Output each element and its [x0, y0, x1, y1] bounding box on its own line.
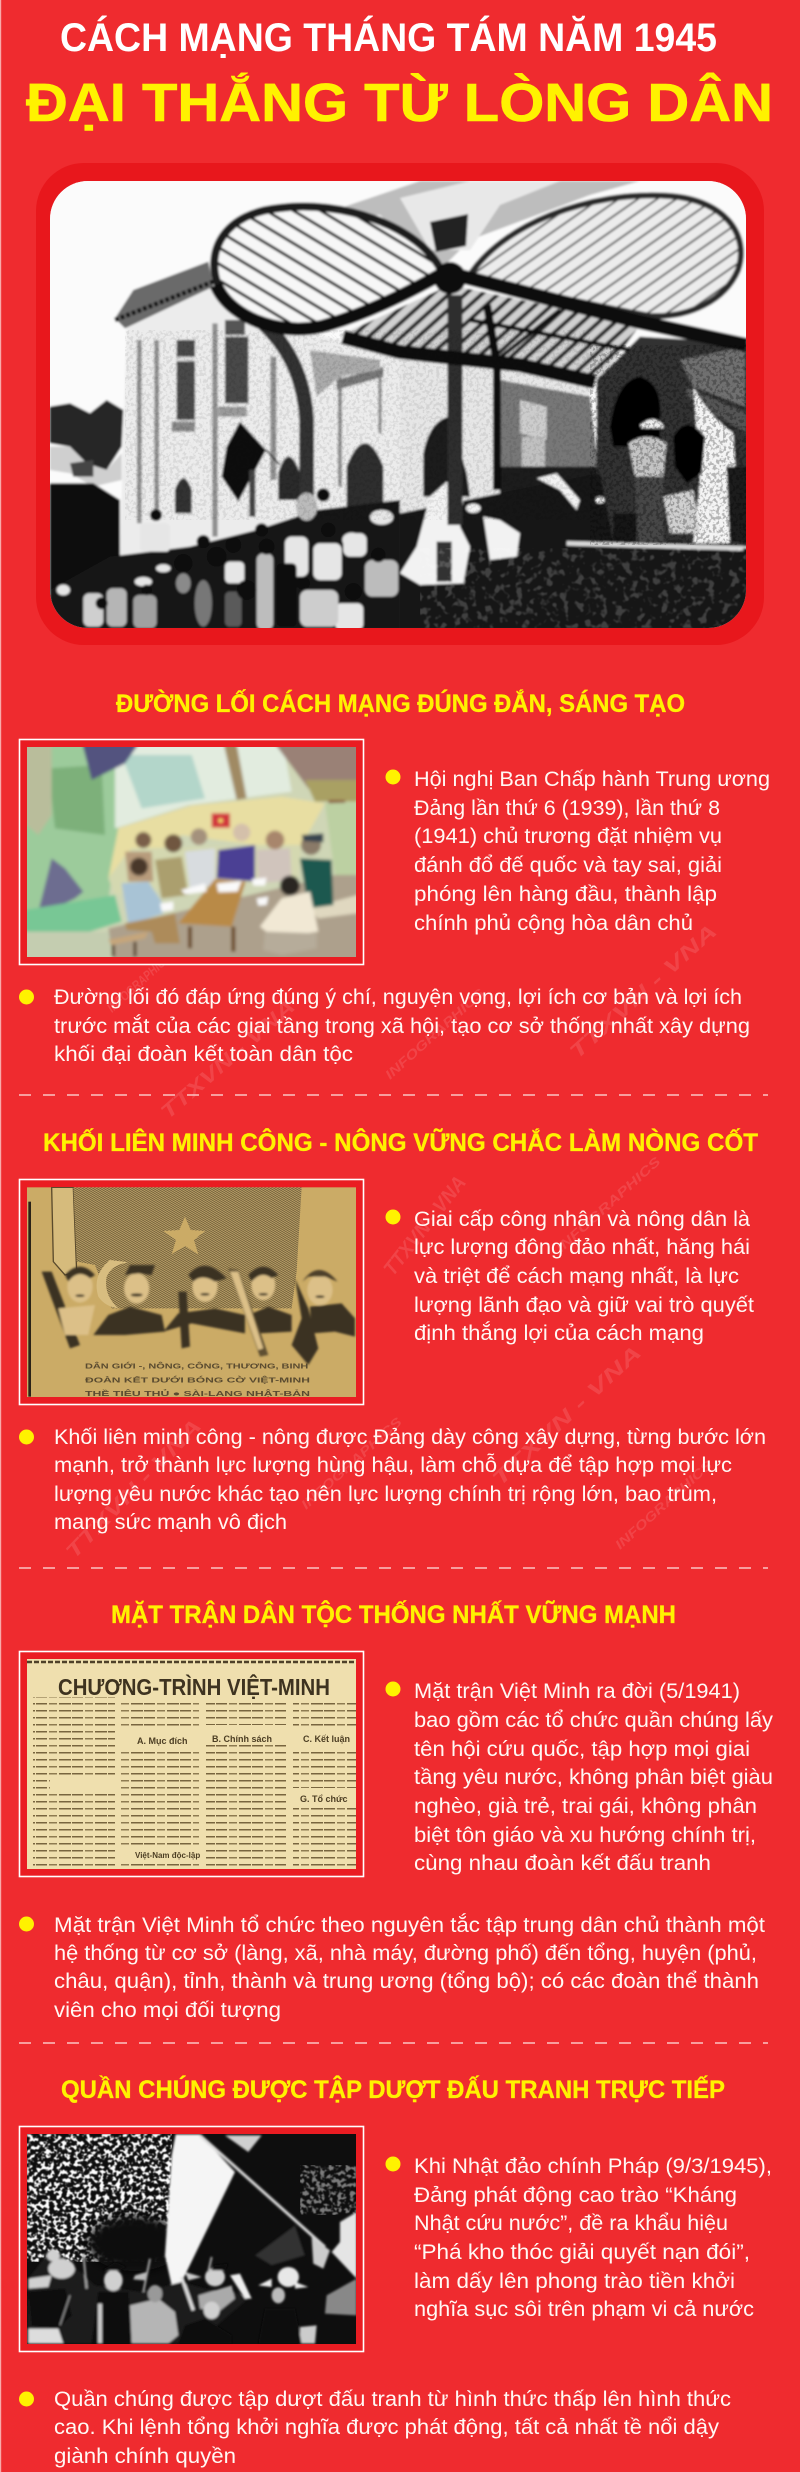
bullet: [19, 1430, 34, 1444]
text block: Mặt trận Việt Minh tổ chức: Mặt trận Việt Minh tổ chức theo nguyên tắc tập trung dân chủ thành một: [54, 1912, 765, 1937]
text block: Quần chúng được tập dượt: giành chính quyền: [54, 2444, 236, 2468]
panel: section 4: [19, 2074, 772, 2468]
text block: Giai cấp công nhân: và triệt để cách mạng nhất, là lực: [414, 1264, 739, 1288]
curved pillar: [263, 323, 307, 513]
text: INFOGRAPHICS: [298, 1414, 405, 1512]
text block: Khi Nhật đảo chính Pháp: [414, 2154, 772, 2321]
text block: Khi Nhật đảo chính Pháp: Khi Nhật đảo chính Pháp (9/3/1945),: [414, 2154, 772, 2178]
text: TTXVN - VNA: [566, 920, 722, 1064]
text block: Khối liên minh công - nông: mang sức mạnh vô địch: [54, 1510, 287, 1534]
text: TTXVN - VNA: [488, 1342, 646, 1491]
bullet: [19, 1916, 34, 1932]
text: TTXVN - VNA: [380, 1172, 471, 1280]
text block: Khi Nhật đảo chính Pháp: nghĩa sục sôi trên phạm vi cả nước: [414, 2297, 754, 2321]
title: [26, 15, 773, 133]
text block: Quần chúng được tập dượt: [54, 2387, 731, 2468]
panel: section 2: [19, 1127, 766, 1534]
text block: Mặt trận Việt Minh ra đời: nghèo, già trẻ, trai gái, không phân: [414, 1794, 757, 1818]
hero photo frame: [36, 163, 764, 645]
text block: Mặt trận Việt Minh ra đời: bao gồm các tổ chức quần chúng lấy: [414, 1708, 773, 1732]
text: INFOGRAPHICS: [104, 950, 174, 1015]
text block: Hội nghị Ban Chấp hành: Đảng lần thứ 6 (1939), lần thứ 8: [414, 796, 720, 820]
text block: Đường lối đó: khối đại đoàn kết toàn dân tộc: [54, 1042, 353, 1066]
panel: section 1: [15, 688, 770, 1066]
image: Chuong trinh Viet Minh newspaper with frame: Việt-Nam độc-lập: [135, 1851, 200, 1860]
panel: hero photo: [36, 163, 764, 645]
bullet: [386, 2156, 400, 2172]
text block: Quần chúng được tập dượt: cao. Khi lệnh tổng khởi nghĩa được phát động, tất cả nhất tề nổi dậy: [54, 2415, 719, 2439]
text block: Mặt trận Việt Minh ra đời: [414, 1679, 773, 1875]
text: INFOGRAPHICS: [553, 1153, 664, 1255]
image: Chuong trinh Viet Minh newspaper with frame: B. Chính sách: [212, 1734, 272, 1744]
text block: Khối liên minh công - nông: Khối liên minh công - nông được Đảng dày công xây dựng, từng bước lớn: [54, 1425, 766, 1449]
title line 1: CÁCH MẠNG THÁNG TÁM NĂM 1945: [60, 15, 717, 60]
text block: Mặt trận Việt Minh tổ chức: châu, quận), tỉnh, thành và trung ương (tổng bộ); có các đoàn thể thành: [54, 1969, 759, 1993]
bullet: [386, 770, 400, 784]
panel: section 3: [19, 1599, 773, 2022]
building back wing: [345, 181, 638, 266]
text block: Đường lối đó: trước mắt của các giai tầng trong xã hội, tạo cơ sở thống nhất xây dựng: [54, 1013, 750, 1038]
text: INFOGRAPHICS: [382, 985, 487, 1082]
foreground mound: [400, 473, 750, 630]
text: INFOGRAPHICS: [612, 1457, 715, 1552]
heading: section 3: MẶT TRẬN DÂN TỘC THỐNG NHẤT VỮNG MẠNH: [111, 1599, 676, 1629]
image: Chuong trinh Viet Minh newspaper with frame: C. Kết luận: [303, 1734, 350, 1744]
canopy posts and beams: [448, 295, 462, 525]
image: Chuong trinh Viet Minh newspaper with frame: G. Tổ chức: [300, 1794, 348, 1804]
text block: Hội nghị Ban Chấp hành: đánh đổ đế quốc và tay sai, giải: [414, 853, 722, 877]
text block: Khối liên minh công - nông: [54, 1425, 766, 1534]
seated figures: [125, 852, 153, 882]
foliage speckles: [27, 2134, 172, 2262]
text block: Đường lối đó: Đường lối đó đáp ứng đúng ý chí, nguyện vọng, lợi ích cơ bản và lợi ích: [54, 985, 742, 1009]
text block: Mặt trận Việt Minh ra đời: Mặt trận Việt Minh ra đời (5/1941): [414, 1679, 740, 1703]
text block: Giai cấp công nhân: Giai cấp công nhân và nông dân là: [414, 1207, 750, 1231]
text block: Khi Nhật đảo chính Pháp: Đảng phát động cao trào “Kháng: [414, 2183, 737, 2207]
text block: Khi Nhật đảo chính Pháp: làm dấy lên phong trào tiền khởi: [414, 2269, 735, 2293]
image: crowd with flag photo with frame: [20, 2126, 364, 2352]
left teardrop canopy: [214, 207, 442, 327]
text block: Mặt trận Việt Minh ra đời: cùng nhau đoàn kết đấu tranh: [414, 1851, 711, 1875]
text block: Giai cấp công nhân: lượng lãnh đạo và giữ vai trò quyết: [414, 1293, 754, 1317]
text block: Giai cấp công nhân: định thắng lợi của cách mạng: [414, 1320, 704, 1345]
text: TTXVN - VNA: [62, 1415, 206, 1563]
heading: section 4: QUẦN CHÚNG ĐƯỢC TẬP DƯỢT ĐẤU TRANH TRỰC TIẾP: [61, 2074, 725, 2104]
heading: section 2: KHỐI LIÊN MINH CÔNG - NÔNG VỮNG CHẮC LÀM NÒNG CỐT: [43, 1127, 758, 1157]
image: meeting painting with frame: [15, 735, 370, 970]
bullet: [19, 2392, 34, 2406]
text block: Giai cấp công nhân: [414, 1207, 754, 1345]
gazebo lower roof: [340, 285, 640, 380]
right teardrop canopy: [468, 195, 741, 316]
image: Viet Minh propaganda drawing with frame: THỀ TIÊU THỦ ● SÀI-LANG NHẬT-BẢN: [85, 1388, 310, 1398]
text block: Hội nghị Ban Chấp hành: Hội nghị Ban Chấp hành Trung ương: [414, 767, 770, 791]
flag: [222, 422, 266, 502]
text block: Hội nghị Ban Chấp hành: [414, 767, 770, 935]
hero photo: crowd at Hanoi Opera House gazebo: [50, 181, 750, 630]
image: Viet Minh propaganda drawing with frame: DÂN GIỚI -, NÔNG, CÔNG, THƯƠNG, BINH: [85, 1361, 308, 1370]
image: Viet Minh propaganda drawing with frame: ĐOÀN KẾT DƯỚI BÓNG CỜ VIỆT-MINH: [85, 1374, 310, 1384]
text block: Khi Nhật đảo chính Pháp: Nhật cứu nước”, đề ra khẩu hiệu: [414, 2211, 728, 2235]
text block: Khối liên minh công - nông: lượng yêu nước khác tạo nên lực lượng chính trị rộng lớn, bao trùm,: [54, 1482, 717, 1506]
text block: Khối liên minh công - nông: mạnh, trở thành lực lượng hùng hậu, làm chỗ dựa để tập hợp mọi lực: [54, 1452, 732, 1477]
text block: Hội nghị Ban Chấp hành: (1941) chủ trương đặt nhiệm vụ: [414, 824, 722, 848]
image: Chuong trinh Viet Minh newspaper with frame: CHƯƠNG-TRÌNH VIỆT-MINH: [58, 1673, 330, 1700]
text block: Đường lối đó: [54, 985, 750, 1066]
heading: section 1: ĐƯỜNG LỐI CÁCH MẠNG ĐÚNG ĐẮN, SÁNG TẠO: [116, 688, 685, 718]
bullet: [386, 1210, 400, 1224]
text block: Quần chúng được tập dượt: Quần chúng được tập dượt đấu tranh từ hình thức thấp lên hình thức: [54, 2387, 731, 2411]
title line 2: ĐẠI THẮNG TỪ LÒNG DÂN: [26, 72, 773, 133]
crowd left: [50, 500, 400, 630]
text block: Mặt trận Việt Minh ra đời: tên hội cứu quốc, tập hợp mọi giai: [414, 1737, 750, 1761]
text block: Mặt trận Việt Minh tổ chức: [54, 1912, 765, 2022]
trees: [50, 400, 123, 470]
image: Chuong trinh Viet Minh newspaper with frame: [20, 1652, 364, 1876]
text block: Mặt trận Việt Minh tổ chức: hệ thống từ cơ sở (làng, xã, nhà máy, đường phố) đến tổng, huyện (phủ,: [54, 1941, 757, 1965]
text block: Giai cấp công nhân: lực lượng đông đảo nhất, hăng hái: [414, 1235, 750, 1259]
text block: Hội nghị Ban Chấp hành: phóng lên hàng đầu, thành lập: [414, 882, 717, 906]
text block: Mặt trận Việt Minh tổ chức: viên cho mọi đối tượng: [54, 1998, 281, 2022]
bullet: [19, 990, 34, 1004]
text block: Hội nghị Ban Chấp hành: chính phủ cộng hòa dân chủ: [414, 911, 693, 935]
wing wall under canopy: [398, 358, 590, 514]
text block: Mặt trận Việt Minh ra đời: biệt tôn giáo và xu hướng chính trị,: [414, 1823, 756, 1847]
bullet: [386, 1682, 400, 1696]
text block: Khi Nhật đảo chính Pháp: “Phá kho thóc giải quyết nạn đói”,: [414, 2240, 750, 2264]
text: TTXVN - VNA: [157, 996, 300, 1124]
image: Chuong trinh Viet Minh newspaper with frame: A. Mục đích: [137, 1736, 188, 1746]
image: Viet Minh propaganda drawing with frame: [20, 1180, 364, 1404]
text block: Mặt trận Việt Minh ra đời: tầng yêu nước, không phân biệt giàu: [414, 1765, 773, 1789]
